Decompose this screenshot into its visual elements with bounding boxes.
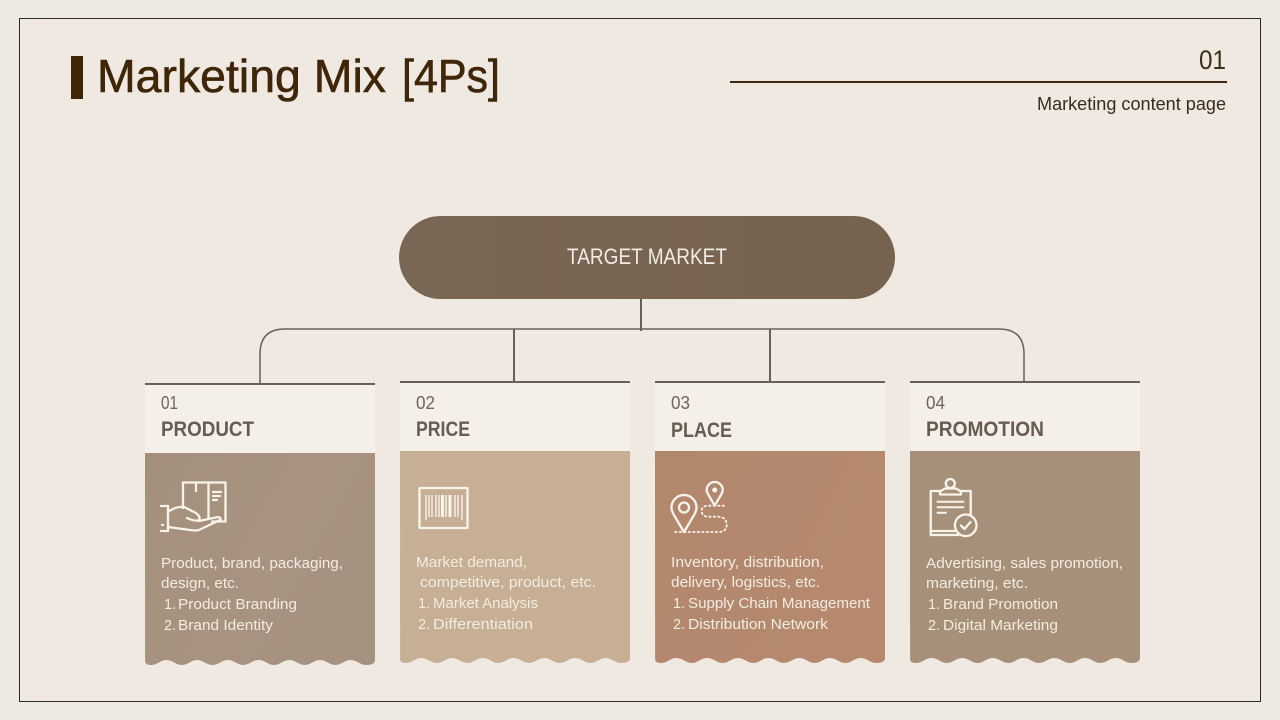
price text: 1. xyxy=(418,596,430,612)
promotion text: Digital Marketing xyxy=(943,618,1058,634)
product text: Brand Identity xyxy=(178,618,274,634)
promotion text xyxy=(926,556,1123,634)
place header: PLACE xyxy=(671,419,732,442)
connector tree xyxy=(260,299,1024,383)
title bracket text: [4Ps] xyxy=(402,50,500,102)
price header xyxy=(400,383,630,451)
price text: Market demand, xyxy=(416,555,527,571)
promotion header xyxy=(910,383,1140,451)
place top rule xyxy=(655,381,885,383)
price text: Differentiation xyxy=(433,617,533,633)
price header: PRICE xyxy=(416,418,470,441)
icon: clipboard with check xyxy=(931,479,976,536)
product text: Product Branding xyxy=(178,597,297,613)
place text: 2. xyxy=(673,617,685,633)
place text xyxy=(671,555,870,633)
page header xyxy=(730,45,1227,114)
header rule xyxy=(730,81,1227,83)
page subtitle: Marketing content page xyxy=(1037,94,1226,114)
product body background xyxy=(145,453,375,665)
promotion text: marketing, etc. xyxy=(926,576,1028,592)
icon: barcode xyxy=(420,488,468,528)
product top rule xyxy=(145,383,375,385)
icon: map pins and route xyxy=(672,482,727,532)
page number: 01 xyxy=(1199,45,1226,75)
place body background xyxy=(655,451,885,663)
price body background xyxy=(400,451,630,663)
title xyxy=(71,50,386,102)
price text: 2. xyxy=(418,617,430,633)
product header xyxy=(145,385,375,453)
title text: Marketing Mix xyxy=(97,50,386,102)
place header: 03 xyxy=(671,393,690,413)
place text: Distribution Network xyxy=(688,617,829,633)
promotion header: PROMOTION xyxy=(926,418,1044,441)
target market pill: TARGET MARKET xyxy=(567,244,727,269)
price text: Market Analysis xyxy=(433,596,538,612)
panel: promotion xyxy=(910,381,1140,663)
place text: Supply Chain Management xyxy=(688,596,870,612)
price header: 02 xyxy=(416,393,435,413)
price top rule xyxy=(400,381,630,383)
product text: design, etc. xyxy=(161,576,239,592)
product header: 01 xyxy=(161,393,178,413)
place header xyxy=(655,383,885,451)
place text: delivery, logistics, etc. xyxy=(671,575,820,591)
promotion body background xyxy=(910,451,1140,663)
panel: price xyxy=(400,381,630,663)
product text: Product, brand, packaging, xyxy=(161,556,343,572)
target market pill xyxy=(399,216,895,299)
product text xyxy=(161,556,343,634)
product text: 1. xyxy=(164,597,176,613)
price text xyxy=(416,555,596,633)
panel: product xyxy=(145,383,375,665)
promotion text: 1. xyxy=(928,597,940,613)
promotion text: Advertising, sales promotion, xyxy=(926,556,1123,572)
promotion top rule xyxy=(910,381,1140,383)
place text: Inventory, distribution, xyxy=(671,555,824,571)
promotion header: 04 xyxy=(926,393,945,413)
promotion text: 2. xyxy=(928,618,940,634)
title accent bar xyxy=(71,56,83,99)
place text: 1. xyxy=(673,596,685,612)
promotion text: Brand Promotion xyxy=(943,597,1058,613)
icon: hand holding box xyxy=(161,482,226,531)
price text: competitive, product, etc. xyxy=(420,575,596,591)
product header: PRODUCT xyxy=(161,418,254,441)
panel: place xyxy=(655,381,885,663)
product text: 2. xyxy=(164,618,176,634)
